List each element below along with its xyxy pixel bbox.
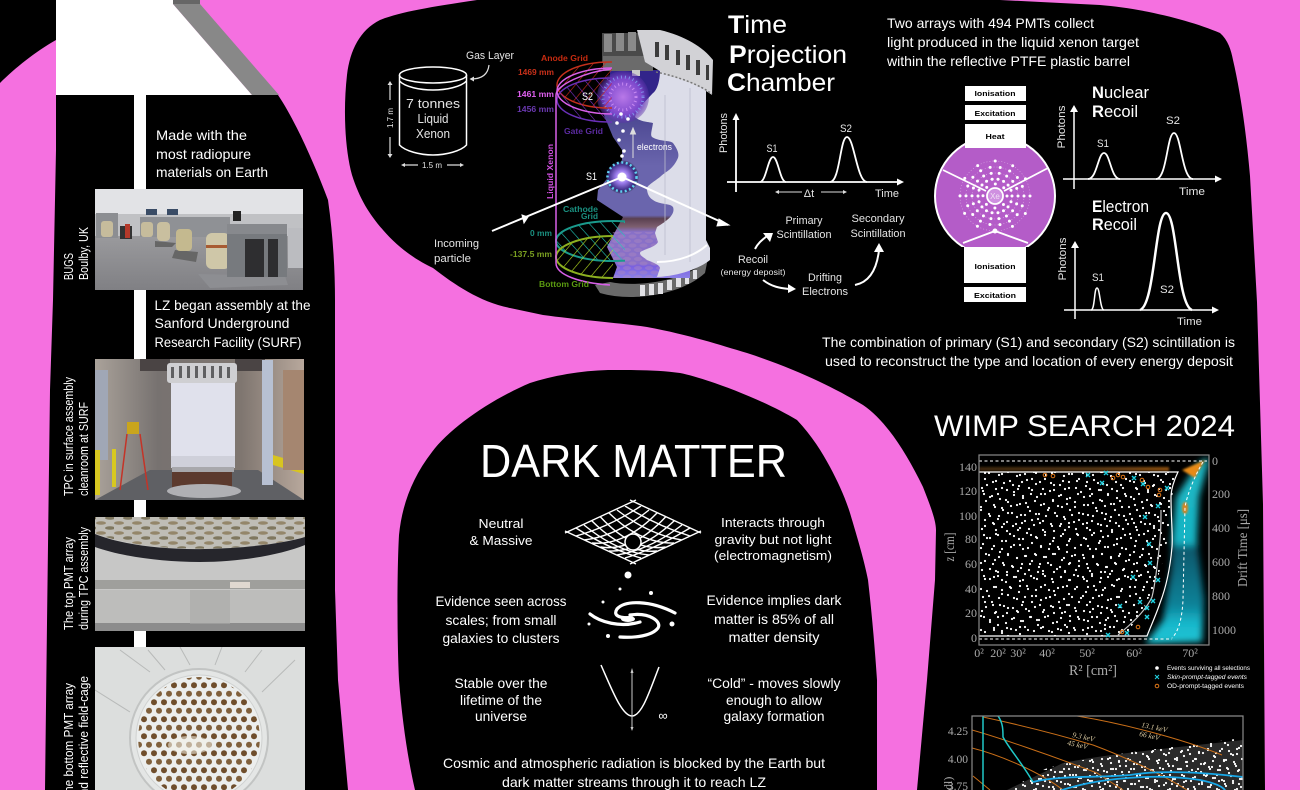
axis labels: Drift Time [μs]: [1236, 509, 1251, 587]
vessel neck: white funnel with grey edge: [56, 0, 279, 95]
band contents: 66 keV: [1139, 729, 1162, 743]
chart: electron recoil: [1057, 197, 1219, 328]
chart: nuclear recoil: [1056, 83, 1222, 198]
axis labels: 70²: [1182, 646, 1198, 660]
diagram: xenon atom energy partition: Ionisation: [974, 262, 1016, 271]
chart: electron recoil: Time: [1177, 316, 1202, 328]
plot contents: [979, 458, 1209, 644]
text: cylinder labels: Xenon: [416, 126, 450, 141]
text: gravity interaction: [714, 515, 832, 563]
electron dots: [615, 112, 630, 158]
text: BUGS caption: Boulby, UK: [76, 227, 91, 280]
grid labels: Liquid Xenon: [545, 144, 555, 199]
box: ionisation top: [965, 86, 1026, 101]
axis labels: [943, 454, 1251, 679]
icon: parabola with infinity: ∞: [658, 708, 668, 723]
chart: electron recoil: S2: [1160, 284, 1174, 296]
chart: S1 and S2 pulses: Time: [875, 188, 899, 200]
text: SURF assembly: Sanford Underground: [154, 315, 290, 331]
axis labels: 400: [1212, 521, 1230, 535]
axis labels: 80: [965, 532, 977, 546]
text: top PMT caption: [61, 527, 91, 630]
markers: skin-prompt-tagged events: [1086, 471, 1169, 637]
chart: nuclear recoil: Nuclear: [1092, 83, 1149, 102]
icon: spacetime mesh with mass: [565, 500, 701, 564]
text: cylinder labels: 1.7 m: [386, 108, 395, 128]
label: electrons: electrons: [637, 142, 672, 152]
grid labels: Cathode: [563, 204, 598, 214]
grid labels: Bottom Grid: [539, 279, 589, 289]
text: neutral and massive: & Massive: [470, 533, 532, 548]
axis labels: 50²: [1079, 646, 1095, 660]
box: ionisation bottom: [964, 247, 1026, 283]
text: SURF assembly: Research Facility (SURF): [154, 334, 302, 350]
grid labels: Grid: [581, 211, 598, 221]
axis labels: 20: [965, 606, 977, 620]
label: incoming particle: [434, 238, 479, 265]
grid labels: -137.5 mm: [510, 249, 552, 259]
bottom grid: [555, 235, 613, 279]
cathode grid: [555, 220, 625, 262]
text block: PMT arrays: [886, 15, 1139, 69]
text: BUGS caption: [61, 227, 91, 280]
axis labels: 1000: [1212, 623, 1236, 637]
lower PMT hexagon texture: [607, 232, 670, 278]
icon: spiral galaxy: [588, 572, 675, 638]
arrows: cylinder dimensions: [388, 65, 489, 167]
liquid xenon level line: [556, 69, 611, 285]
y axis tick labels: dl): [941, 777, 955, 790]
panel: LZ detector construction: [45, 0, 348, 790]
chart: electron recoil: Recoil: [1092, 215, 1137, 234]
grid labels: [510, 53, 603, 289]
chart: electron recoil: S1: [1092, 272, 1104, 284]
text: evidence across scales: scales; from small: [446, 612, 556, 628]
title: Dark Matter: DARK MATTER: [480, 435, 787, 487]
legend: OD-prompt-tagged events: [1167, 684, 1244, 690]
axis labels: 30²: [1010, 646, 1026, 660]
text: top PMT caption: during TPC assembly: [76, 527, 91, 630]
band contents: 9.3 keV: [1072, 730, 1097, 744]
grid labels: 1469 mm: [518, 67, 554, 77]
labels: signals S1 and S2: S1: [586, 171, 597, 183]
text: radiopure materials: most radiopure: [156, 146, 251, 162]
text: 85 percent density: matter density: [728, 629, 820, 645]
photo: TPC in surface assembly cleanroom: [95, 359, 304, 500]
grid labels: 1461 mm: [517, 89, 554, 99]
diagram: xenon atom energy partition: Xe: [990, 192, 1000, 201]
axis labels: 20²: [990, 646, 1006, 660]
legend: [1155, 666, 1250, 690]
anode and gate grids: [556, 61, 612, 123]
central white pipe: [134, 95, 146, 790]
frame: [972, 716, 1243, 790]
chart: S1 and S2 pulses: S1: [766, 143, 778, 155]
box: excitation bottom: [964, 287, 1026, 302]
text: TPC photo caption: TPC in surface assembly: [61, 377, 76, 496]
flow diagram: recoil to scintillation: Recoil: [738, 254, 768, 266]
title: Time Projection Chamber: Chamber: [727, 69, 835, 97]
grid labels: 1456 mm: [517, 104, 554, 114]
diagram: xenon atom energy partition: Ionisation: [974, 89, 1016, 98]
legend: Events surviving all selections: [1167, 666, 1250, 672]
chart: nuclear recoil: S1: [1097, 138, 1109, 150]
text: radiopure materials: materials on Earth: [156, 164, 268, 180]
diagram: xenon atom energy partition: Heat: [986, 132, 1005, 141]
chart: electron recoil: Photons: [1057, 237, 1069, 280]
axis labels: R² [cm²]: [1069, 663, 1117, 679]
y axis tick labels: [941, 726, 968, 790]
chart: S1 and S2 pulses: S2: [840, 123, 852, 135]
flow diagram: recoil to scintillation: (energy deposit): [720, 267, 786, 277]
text: gravity interaction: (electromagnetism): [714, 548, 832, 563]
flow diagram: recoil to scintillation: Primary: [786, 215, 823, 227]
chart: WIMP search discrimination band: [941, 716, 1261, 790]
diagram: xenon atom energy partition: [935, 86, 1055, 302]
inner liquid xenon volume: [597, 113, 690, 278]
label: incoming particle: Incoming: [434, 238, 479, 250]
panel: time projection chamber and WIMP search background: [345, 0, 1265, 790]
text: TPC photo caption: cleanroom at SURF: [76, 402, 91, 496]
text: 85 percent density: [706, 592, 842, 645]
diagram: xenon atom energy partition: Excitation: [974, 291, 1016, 300]
text block: PMT arrays: within the reflective PTFE plastic barrel: [886, 53, 1130, 69]
axis labels: 800: [1212, 589, 1230, 603]
text block: PMT arrays: light produced in the liquid xenon target: [887, 34, 1139, 50]
text: top PMT caption: The top PMT array: [61, 537, 76, 630]
text: 85 percent density: matter is 85% of all: [714, 611, 834, 627]
PTFE barrel: [635, 60, 710, 277]
top PMT housing: [602, 32, 653, 76]
chart: S1 and S2 pulses: Photons: [718, 113, 730, 153]
axis labels: 100: [959, 509, 977, 523]
chart: electron recoil: Electron: [1092, 197, 1149, 216]
grid labels: Anode Grid: [541, 53, 588, 63]
axis labels: 0: [1212, 454, 1218, 468]
text: cold dark matter: galaxy formation: [724, 709, 824, 724]
flow diagram: recoil to scintillation: Electrons: [802, 286, 848, 298]
photo: bottom PMT array: [95, 647, 305, 790]
flow diagram: recoil to scintillation: Drifting: [808, 272, 842, 284]
text: evidence across scales: [436, 593, 566, 646]
chart: nuclear recoil: Recoil: [1092, 102, 1138, 121]
plot frame: [979, 455, 1209, 645]
band contents: 13.1 keV: [1141, 720, 1170, 735]
grid labels: 0 mm: [530, 228, 552, 238]
markers: OD-prompt-tagged events: [1043, 473, 1162, 634]
text: BUGS caption: BUGS: [61, 253, 76, 280]
chart: S1 and S2 pulses: Δt: [804, 188, 814, 200]
top silver ring: [637, 30, 713, 95]
panel: dark matter background: [398, 370, 877, 790]
text block: S1 S2 reconstruction: used to reconstruct the type and location of every energy deposit: [825, 353, 1233, 369]
axis labels: z [cm]: [943, 532, 958, 562]
text: gravity interaction: Interacts through: [721, 515, 825, 530]
text: stable over lifetime: Stable over the: [454, 676, 548, 691]
text: cold dark matter: [708, 676, 841, 724]
axis labels: 200: [1212, 487, 1230, 501]
chart: nuclear recoil: S2: [1166, 115, 1180, 127]
text: cylinder labels: Liquid: [418, 111, 448, 126]
text block: PMT arrays: Two arrays with 494 PMTs collect: [887, 15, 1094, 31]
label: incoming particle: particle: [434, 253, 471, 265]
y axis tick labels: 4.00: [948, 754, 968, 766]
flow diagram: recoil to scintillation: Secondary: [852, 213, 905, 225]
axis labels: 0: [971, 631, 977, 645]
text: gravity interaction: gravity but not light: [714, 532, 832, 547]
photo: BUGS Boulby: [95, 189, 303, 290]
axis labels: 60: [965, 557, 977, 571]
S2 glow: [597, 71, 649, 123]
labels: signals S1 and S2: [582, 91, 597, 183]
flow diagram: recoil to scintillation: Scintillation: [850, 228, 906, 240]
text: radiopure materials: [156, 127, 268, 180]
icon: parabola with infinity: [601, 665, 668, 731]
axis labels: 0²: [974, 646, 984, 660]
text: stable over lifetime: lifetime of the: [460, 693, 542, 708]
text: cold dark matter: enough to allow: [726, 693, 822, 708]
text: SURF assembly: [154, 297, 311, 350]
chart: WIMP search scatter, z vs R squared: [943, 454, 1251, 690]
text: cold dark matter: “Cold” - moves slowly: [708, 676, 841, 691]
axis labels: 600: [1212, 555, 1230, 569]
title: Time Projection Chamber: Time: [728, 11, 787, 39]
arrow: incoming particle: [492, 172, 729, 231]
text: cosmic radiation blocked: [443, 755, 825, 790]
arrow: electrons drift: [630, 128, 636, 158]
text: TPC photo caption: [61, 377, 91, 496]
band contents: [972, 716, 1261, 790]
flow diagram: recoil to scintillation: [720, 213, 906, 298]
chart: S1 and S2 pulses: [718, 113, 904, 200]
text: 85 percent density: Evidence implies dark: [706, 592, 842, 608]
y axis tick labels: 4.25: [948, 726, 968, 738]
box: heat: [965, 124, 1026, 148]
icon: liquid xenon cylinder: [400, 67, 466, 155]
text: cosmic radiation blocked: Cosmic and atmospheric radiation is blocked by the Earth but: [443, 755, 825, 771]
text block: S1 S2 reconstruction: The combination of primary (S1) and secondary (S2) scintillation is: [822, 334, 1235, 350]
axis labels: 60²: [1126, 646, 1142, 660]
top-left black corner shape: [0, 0, 56, 83]
labels: signals S1 and S2: S2: [582, 91, 593, 103]
title: WIMP Search 2024: WIMP SEARCH 2024: [934, 410, 1235, 443]
vessel body: [45, 95, 348, 790]
axis labels: 140: [959, 460, 977, 474]
diagram: xenon atom energy partition: Excitation: [974, 109, 1016, 118]
text: radiopure materials: Made with the: [156, 127, 247, 143]
axis labels: 120: [959, 484, 977, 498]
text: cylinder labels: 7 tonnes: [406, 96, 461, 111]
grid labels: Gate Grid: [564, 126, 603, 136]
text: stable over lifetime: [454, 676, 548, 724]
axis labels: 40²: [1039, 646, 1055, 660]
flow diagram: recoil to scintillation: Scintillation: [776, 229, 832, 241]
legend: Skin-prompt-tagged events: [1167, 675, 1247, 681]
text: neutral and massive: Neutral: [478, 516, 524, 531]
bottom PMTs: [595, 258, 708, 297]
text: cylinder labels: [386, 50, 514, 170]
chart: nuclear recoil: Photons: [1056, 105, 1068, 148]
box: excitation top: [965, 105, 1026, 120]
chart: nuclear recoil: Time: [1179, 186, 1205, 198]
title: Time Projection Chamber: [727, 11, 847, 97]
atom electron shells: [943, 161, 1048, 243]
diagram: time projection chamber cutaway: [492, 30, 729, 297]
title: Time Projection Chamber: Projection: [729, 41, 847, 69]
text: SURF assembly: LZ began assembly at the: [154, 297, 311, 313]
text block: S1 S2 reconstruction: [822, 334, 1235, 369]
band contents: 45 keV: [1067, 738, 1090, 752]
text: evidence across scales: Evidence seen across: [436, 593, 566, 609]
top hexagon array: [610, 70, 672, 113]
text: cylinder labels: Gas Layer: [466, 50, 514, 62]
text: cosmic radiation blocked: dark matter streams through it to reach LZ: [502, 774, 766, 790]
text: stable over lifetime: universe: [475, 709, 527, 724]
text: bottom PMT caption: [61, 676, 91, 790]
text: evidence across scales: galaxies to clusters: [442, 630, 560, 646]
text: cylinder labels: 1.5 m: [422, 161, 442, 170]
axis labels: 40: [965, 582, 977, 596]
photo: top PMT array: [95, 517, 305, 631]
text: neutral and massive: [470, 516, 532, 548]
S1 glow: [605, 160, 639, 194]
